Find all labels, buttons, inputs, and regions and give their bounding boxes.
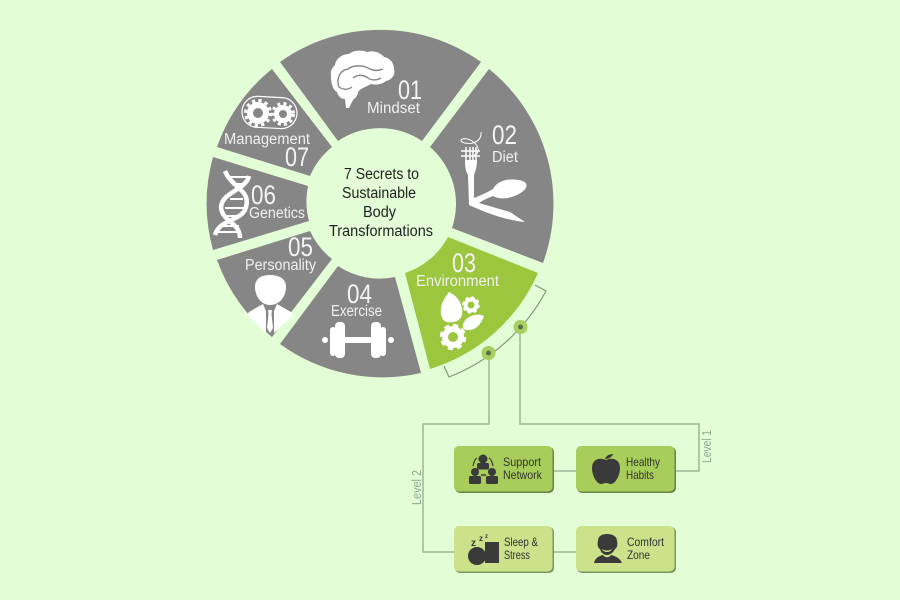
- connector: level 2: [423, 353, 489, 552]
- icon: fork spoon knife: [461, 132, 527, 222]
- label level 1: Level 1: [699, 430, 714, 463]
- number 02: 02: [492, 120, 517, 150]
- number 04: 04: [347, 279, 372, 309]
- bracket arc around environment: [444, 285, 546, 377]
- node: level 2: [482, 346, 496, 360]
- text: healthy habits: Habits: [626, 468, 654, 482]
- card: comfort zone: [576, 526, 676, 573]
- label diet: Diet: [492, 149, 519, 166]
- icon: dna helix: [215, 171, 249, 238]
- text: healthy habits: Healthy: [626, 455, 660, 469]
- card: support network: [454, 446, 554, 493]
- icon: brain: [331, 51, 394, 108]
- icon: businessman: [247, 275, 293, 333]
- text: sleep and stress: Stress: [504, 548, 530, 562]
- connector: level 1: [520, 327, 699, 471]
- connector: box links: [553, 471, 576, 552]
- icon: sleep: z: [479, 534, 483, 543]
- number 03: 03: [452, 248, 476, 278]
- panel: 05 personality: [217, 231, 332, 337]
- panel: 06 genetics: [207, 157, 309, 250]
- label level 2: Level 2: [409, 470, 424, 505]
- card: sleep and stress: [454, 526, 554, 573]
- panel: 04 exercise: [280, 266, 421, 377]
- title: [329, 166, 433, 240]
- icon: sleep: z: [471, 538, 476, 549]
- title: Body: [363, 204, 396, 221]
- node: level 1: [514, 320, 528, 334]
- label exercise: Exercise: [331, 303, 382, 320]
- title: Sustainable: [342, 185, 416, 202]
- icon: apple: [592, 454, 620, 484]
- number 05: 05: [288, 232, 313, 262]
- icon: leaves and flowers: [441, 292, 484, 348]
- number 01: 01: [398, 75, 422, 105]
- panel: 01 mindset: [280, 30, 481, 141]
- number 07: 07: [285, 142, 309, 172]
- text: comfort zone: Comfort: [627, 535, 665, 549]
- icon: sleep: [468, 534, 499, 565]
- icon: smiling face: [594, 534, 622, 563]
- title: 7 Secrets to: [344, 166, 419, 183]
- card: healthy habits: [576, 446, 676, 493]
- label personality: Personality: [245, 257, 316, 274]
- text: support network: Support: [503, 455, 542, 469]
- label genetics: Genetics: [249, 205, 305, 222]
- text: support network: Network: [503, 468, 543, 482]
- title: Transformations: [329, 223, 433, 240]
- label management: Management: [224, 131, 311, 148]
- panel: 03 environment: [405, 237, 538, 369]
- number 06: 06: [251, 180, 276, 210]
- icon: dumbbell: [322, 322, 394, 358]
- label environment: Environment: [416, 273, 500, 290]
- label mindset: Mindset: [367, 100, 421, 117]
- icon: people network: [469, 454, 498, 484]
- text: comfort zone: Zone: [627, 548, 650, 562]
- icon: gears with belt: [241, 96, 298, 129]
- icon: sleep: z: [485, 534, 488, 540]
- text: sleep and stress: Sleep &: [504, 535, 538, 549]
- panel: 07 management: [217, 69, 332, 176]
- panel: 02 diet: [430, 69, 553, 263]
